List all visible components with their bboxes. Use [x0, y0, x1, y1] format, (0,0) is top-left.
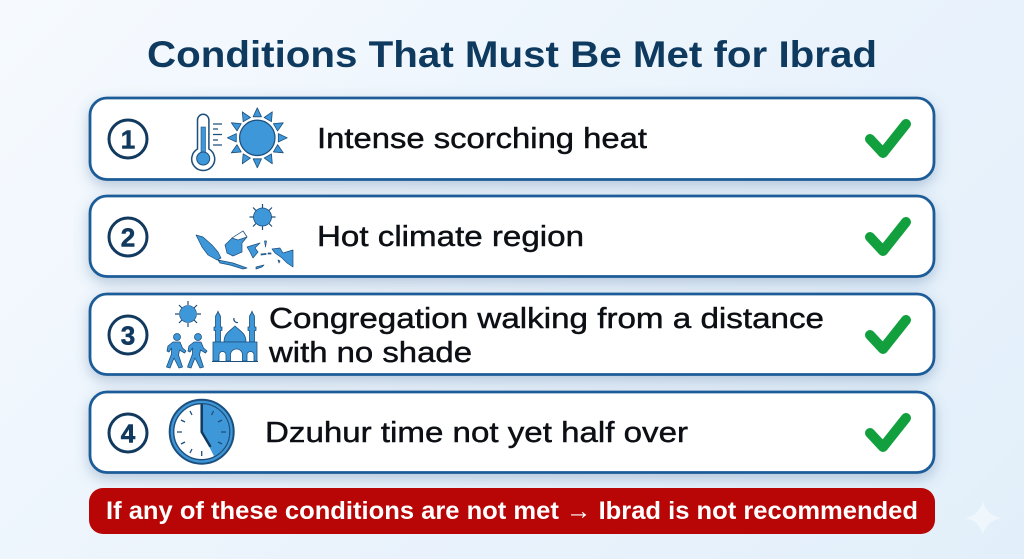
number badge 3: 3 — [121, 320, 135, 350]
title: Conditions That Must Be Met for Ibrad — [147, 34, 877, 75]
panel: condition 1 — [90, 98, 934, 180]
panel: condition 3 — [90, 294, 934, 374]
number badge 3 — [109, 316, 147, 354]
label 3: with no shade — [268, 337, 472, 369]
warning banner: If any of these conditions are not met → Ibrad is not recommended — [106, 497, 918, 525]
check mark 3 — [870, 320, 906, 349]
number badge 4 — [109, 414, 147, 452]
icon: thermometer and sun — [192, 108, 287, 170]
icon: sun, walkers and mosque — [166, 301, 258, 368]
panel: condition 2 — [90, 196, 934, 276]
number badge 1 — [109, 120, 147, 158]
icon: clock — [170, 400, 234, 464]
label 4: Dzuhur time not yet half over — [265, 417, 688, 449]
label 1: Intense scorching heat — [317, 123, 647, 155]
number badge 2 — [109, 218, 147, 256]
number badge 2: 2 — [121, 222, 135, 252]
check mark 1 — [870, 124, 906, 153]
number badge 1: 1 — [121, 124, 135, 154]
number badge 4: 4 — [121, 418, 136, 448]
label 3: Congregation walking from a distance — [269, 303, 824, 335]
check mark 2 — [870, 222, 906, 251]
label 3 — [268, 303, 824, 369]
icon: sun over Indonesia map — [196, 204, 293, 269]
panel: condition 4 — [90, 392, 934, 472]
label 2: Hot climate region — [317, 221, 584, 253]
sparkle watermark — [966, 502, 1000, 534]
check mark 4 — [870, 418, 906, 447]
warning banner — [89, 488, 935, 534]
